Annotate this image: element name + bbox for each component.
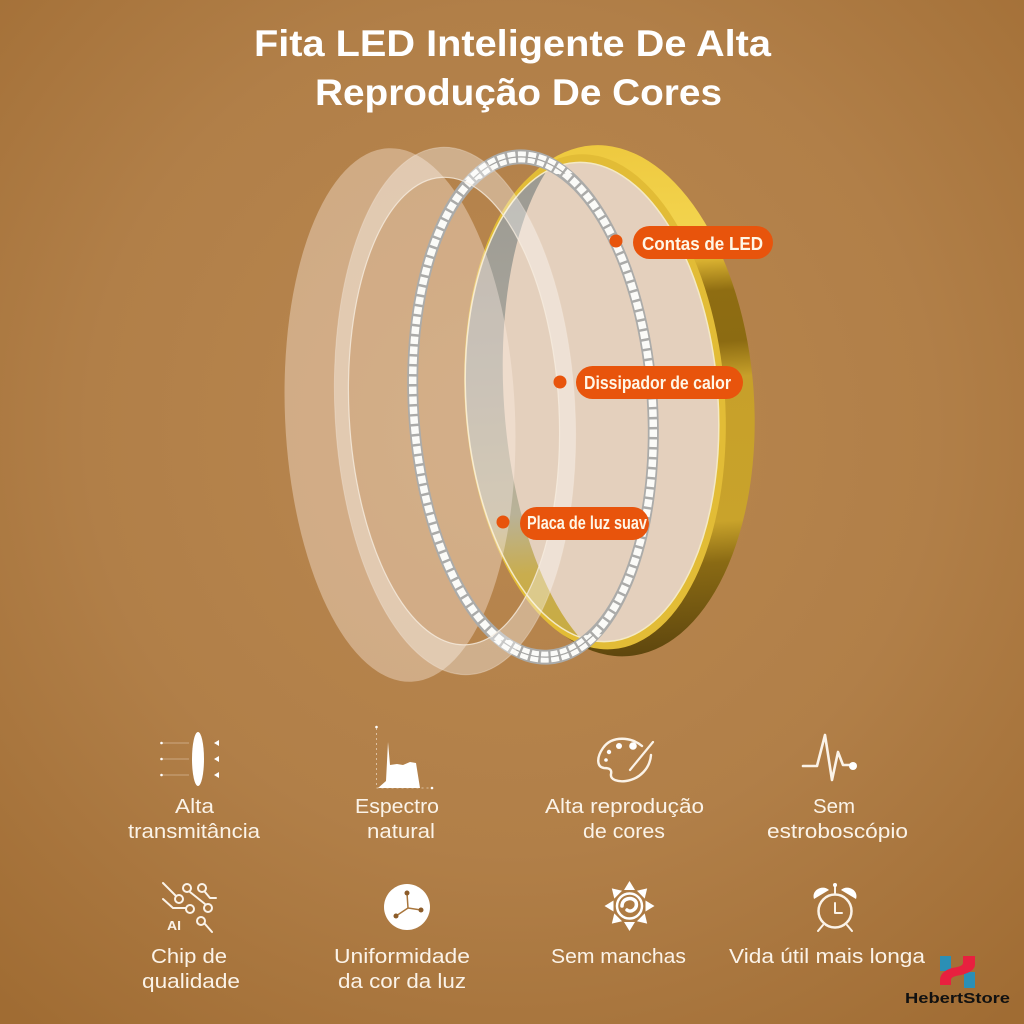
feature: Alta reprodução de cores: de cores (583, 821, 665, 843)
icon: spectrum chart (375, 726, 433, 789)
icon: pulse (803, 735, 857, 780)
feature: Uniformidade da cor da luz: Uniformidade (334, 946, 470, 968)
gold frame (447, 135, 771, 666)
feature: Espectro natural (355, 726, 439, 843)
translucent diffuser disk (273, 143, 527, 687)
title: Reprodução De Cores (315, 72, 722, 113)
callout: Dissipador de calor (554, 366, 743, 399)
icon: three-node circle (384, 884, 430, 930)
callout: Contas de LED (610, 226, 773, 259)
feature: Alta transmitância: Alta (175, 796, 215, 818)
feature: Chip de qualidade: Chip de (151, 946, 227, 968)
title (254, 23, 771, 113)
feature: Sem manchas: Sem manchas (551, 946, 686, 968)
feature: Espectro natural: Espectro (355, 796, 439, 818)
icon: AI circuit: AI (167, 918, 181, 933)
feature: Alta reprodução de cores (545, 739, 704, 843)
callout: Placa de luz suav (496, 507, 649, 540)
logo: HebertStore (905, 956, 1010, 1007)
feature: Vida útil mais longa (729, 883, 926, 968)
feature: Uniformidade da cor da luz: da cor da luz (338, 971, 466, 993)
icon: lens (160, 732, 219, 786)
feature: Alta transmitância: transmitância (128, 821, 261, 843)
title: Fita LED Inteligente De Alta (254, 23, 771, 64)
callout: Dissipador de calor: Dissipador de calor (584, 373, 731, 393)
feature: Alta transmitância (128, 732, 261, 843)
feature: Alta reprodução de cores: Alta reprodução (545, 796, 704, 818)
feature: Espectro natural: natural (367, 821, 435, 843)
LED ring (407, 149, 659, 665)
feature: Uniformidade da cor da luz (334, 884, 470, 993)
icon: alarm clock (814, 883, 856, 931)
feature: Vida útil mais longa: Vida útil mais longa (729, 946, 926, 968)
callout: Placa de luz suav: Placa de luz suav (527, 513, 647, 533)
feature: Chip de qualidade: qualidade (142, 971, 240, 993)
exploded LED panel diagram (284, 145, 755, 682)
feature: Sem estroboscópio (767, 735, 908, 843)
feature: Sem manchas (551, 881, 686, 968)
feature: Sem estroboscópio: Sem (813, 796, 855, 818)
logo: HebertStore: HebertStore (905, 990, 1010, 1007)
feature: Sem estroboscópio: estroboscópio (767, 821, 908, 843)
feature: Chip de qualidade (142, 883, 240, 993)
icon: sun spiral (604, 881, 654, 931)
icon: palette (598, 739, 653, 781)
soft light plate (464, 162, 720, 642)
callout: Contas de LED: Contas de LED (642, 234, 763, 254)
transparent cover ring (321, 141, 589, 681)
